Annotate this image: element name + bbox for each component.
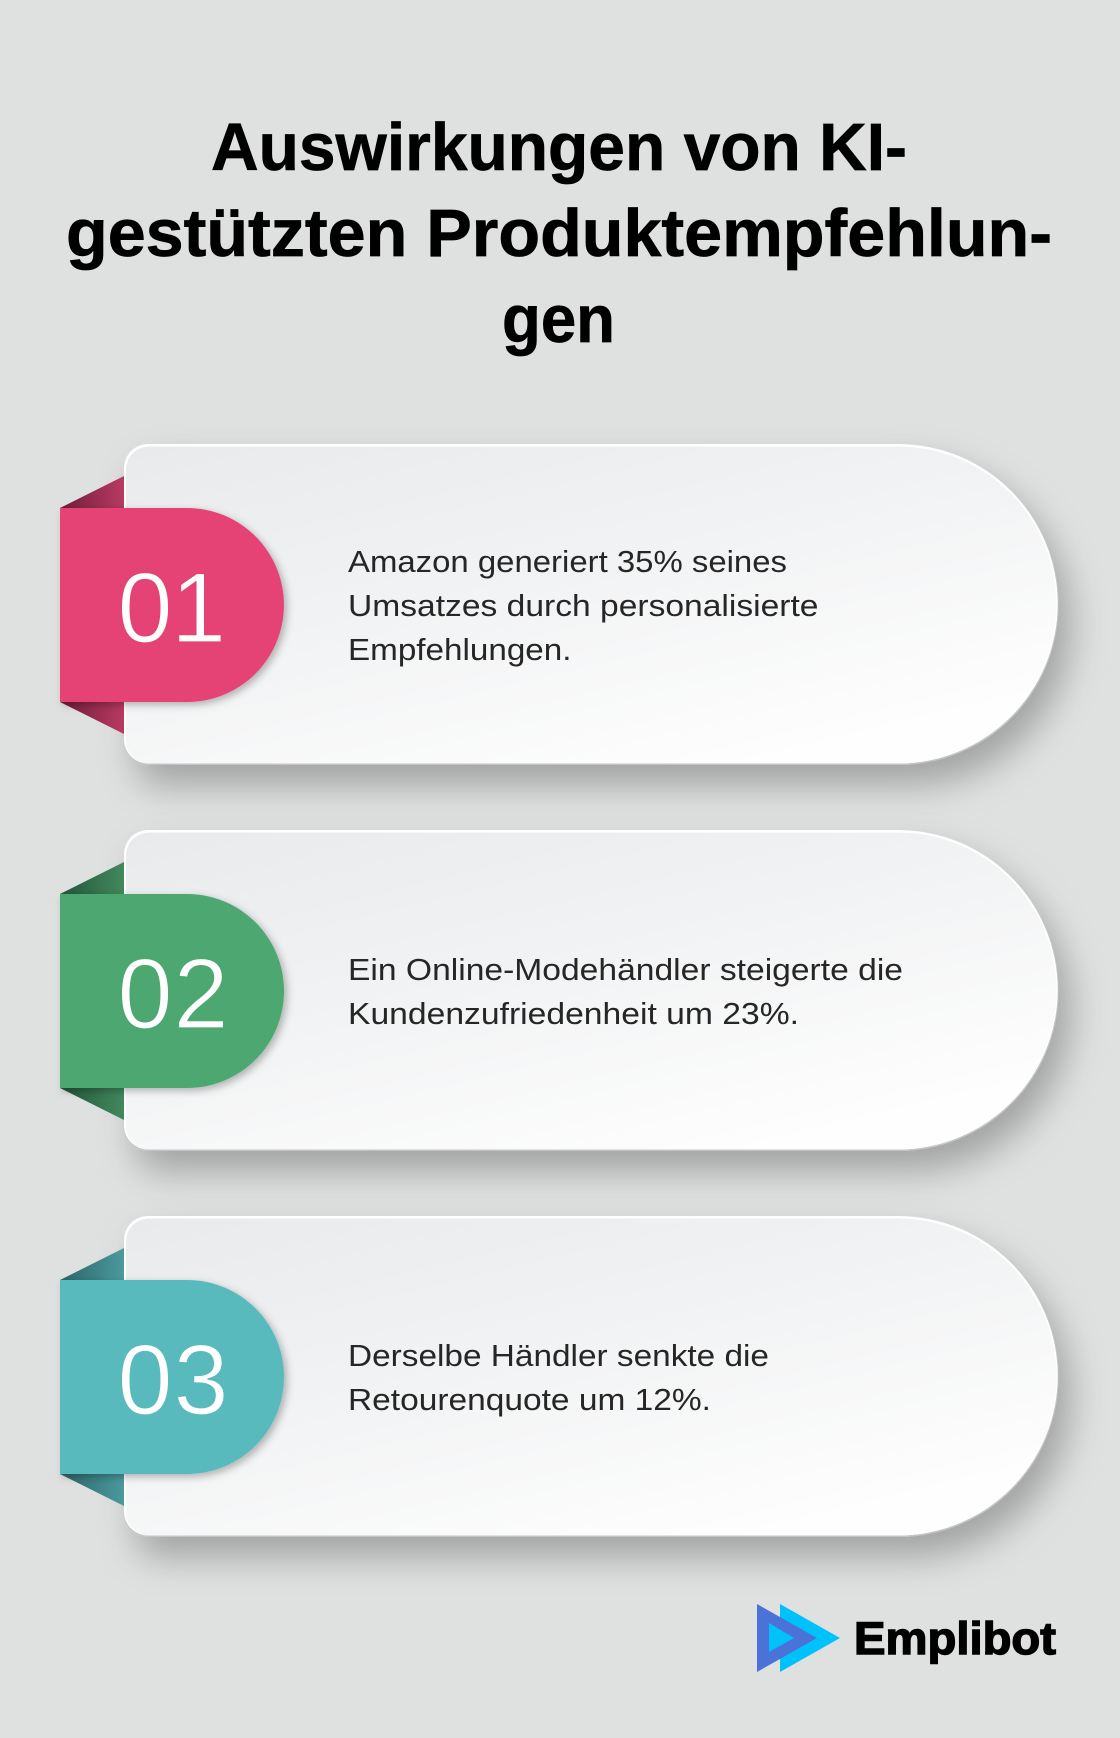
text 01 [348, 544, 818, 667]
number 02: 02 [118, 938, 229, 1049]
panel: step 02 [60, 830, 1058, 1151]
panel: step 01 [60, 444, 1058, 765]
number badge 03 [60, 1280, 284, 1474]
title: Auswirkungen von KI- [211, 110, 907, 185]
logo: Emplibot [757, 1604, 1056, 1672]
text 02 [348, 952, 903, 1031]
card 01 [124, 444, 1058, 765]
ribbon fold top 01 [60, 476, 124, 508]
icon: play triangles [757, 1604, 840, 1672]
title: gestützten Produktempfehlun- [66, 196, 1052, 271]
card 03 [124, 1216, 1058, 1537]
card 02 [124, 830, 1058, 1151]
text 01: Umsatzes durch personalisierte [348, 588, 818, 623]
text 03 [348, 1338, 769, 1417]
title [66, 110, 1052, 357]
text 02: Kundenzufriedenheit um 23%. [348, 996, 799, 1031]
text 03: Derselbe Händler senkte die [348, 1338, 769, 1373]
panel: step 03 [60, 1216, 1058, 1537]
ribbon fold bottom 03 [60, 1474, 124, 1506]
logo wordmark: Emplibot [854, 1613, 1056, 1664]
text 01: Empfehlungen. [348, 632, 572, 667]
number badge 02 [60, 894, 284, 1088]
text 02: Ein Online-Modehändler steigerte die [348, 952, 903, 987]
ribbon fold top 02 [60, 862, 124, 894]
text 03: Retourenquote um 12%. [348, 1382, 711, 1417]
ribbon fold top 03 [60, 1248, 124, 1280]
text 01: Amazon generiert 35% seines [348, 544, 787, 579]
title: gen [502, 282, 615, 357]
number badge 01 [60, 508, 284, 702]
number 01: 01 [118, 552, 226, 663]
number 03: 03 [118, 1324, 229, 1435]
ribbon fold bottom 02 [60, 1088, 124, 1120]
ribbon fold bottom 01 [60, 702, 124, 734]
